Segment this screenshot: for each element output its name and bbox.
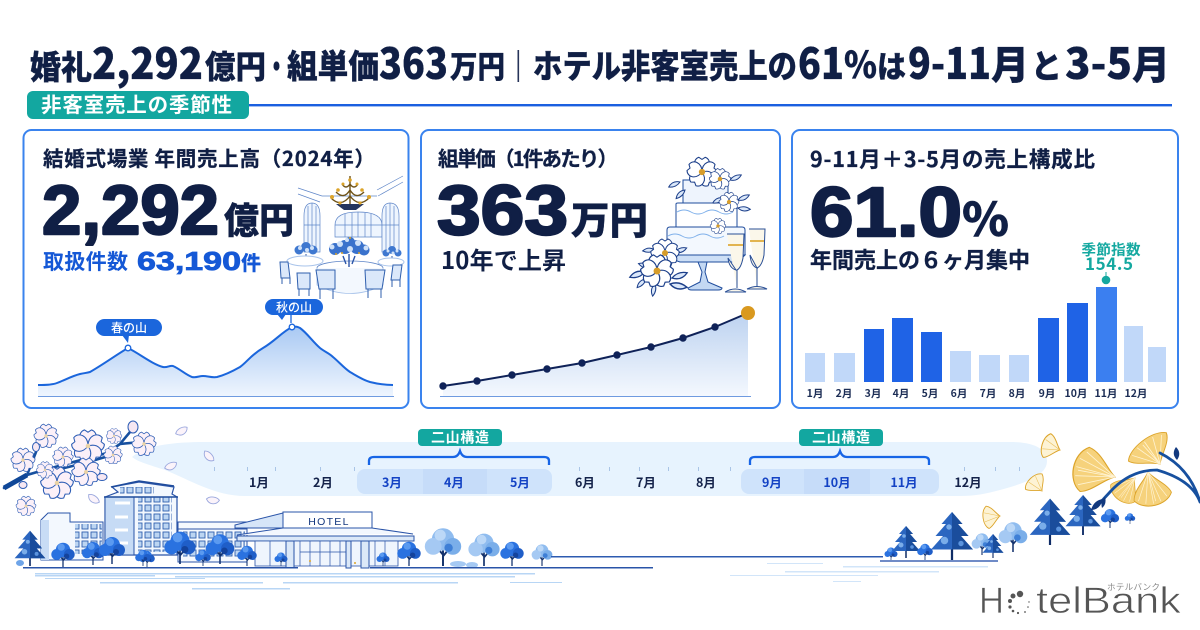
- month labels: 10月: [823, 472, 851, 491]
- bar chart: monthly index: 1月: [807, 386, 823, 401]
- bar chart: monthly index: 5月: [922, 386, 938, 401]
- bracket: spring: [369, 451, 549, 465]
- tower: [104, 481, 178, 555]
- illustration: ballroom: [280, 176, 404, 299]
- title: 61: [798, 30, 844, 92]
- bar chart: monthly index: 12月: [1125, 386, 1147, 401]
- title: 9-11: [908, 30, 991, 92]
- badge: two peaks, autumn: [799, 428, 883, 448]
- title: 月: [991, 35, 1029, 91]
- title: [30, 30, 1170, 92]
- callout: spring peak: 春の山: [111, 319, 147, 336]
- badge: two peaks, spring: 二山構造: [431, 428, 489, 448]
- panel: annual revenue: 件: [241, 247, 261, 276]
- unit: 万円: [571, 190, 648, 245]
- title: ・: [266, 42, 287, 88]
- icon: champagne glasses: [725, 229, 767, 292]
- badge: two peaks, autumn: 二山構造: [812, 428, 870, 448]
- trees: [15, 528, 552, 568]
- month labels: 1月: [249, 472, 269, 491]
- right wing: [178, 522, 247, 562]
- title: 3-5: [1065, 30, 1132, 92]
- illustration: autumn treeline: [730, 495, 1160, 600]
- month labels: 12月: [954, 472, 982, 491]
- callout: peak index: 季節指数: [1082, 239, 1141, 260]
- month labels: 4月: [444, 472, 464, 491]
- title: 月: [1132, 35, 1170, 91]
- logo: HotelBank: telBank: [1036, 580, 1182, 621]
- month labels: 5月: [510, 472, 530, 491]
- tables and chairs: [280, 237, 404, 299]
- left wing: [41, 513, 103, 560]
- month labels: 9月: [762, 472, 782, 491]
- icon: chandelier: [330, 176, 371, 210]
- month labels: 7月: [636, 472, 656, 491]
- bar chart: monthly index: 7月: [980, 386, 996, 401]
- section header: 非客室売上の季節性: [41, 88, 232, 118]
- ticks: [214, 467, 1020, 471]
- highlight: March to May: [357, 469, 552, 494]
- title: ホテル非客室売上の: [533, 40, 797, 88]
- line chart: price rise: [439, 306, 755, 397]
- month labels: 11月: [890, 472, 918, 491]
- unit: 億円: [224, 192, 294, 244]
- bar chart: monthly index: 4月: [893, 386, 909, 401]
- illustration: hotel building: [15, 481, 883, 590]
- value: 2,292: [42, 171, 219, 249]
- month labels: 8月: [696, 472, 716, 491]
- title: と: [1031, 40, 1062, 88]
- value: 61.0: [810, 173, 962, 251]
- subtext: 年間売上の６ヶ月集中: [810, 243, 1030, 275]
- bar chart: monthly index: 6月: [951, 386, 967, 401]
- title: 2,292: [92, 30, 203, 92]
- logo: HotelBank: H: [979, 580, 1004, 621]
- callout: autumn peak: [265, 298, 323, 323]
- heading: 結婚式場業 年間売上高（2024年）: [43, 142, 375, 172]
- title: 組単価: [287, 40, 379, 88]
- logo: HotelBank: ホテルバンク: [1107, 581, 1160, 593]
- bar chart: monthly index: 11月: [1095, 386, 1117, 401]
- callout: peak index: [1082, 239, 1141, 284]
- title: 万円: [450, 42, 505, 87]
- panel: annual revenue: [24, 130, 408, 408]
- logo: HotelBank: [979, 580, 1182, 621]
- title: %: [844, 35, 877, 89]
- heading: 組単価（1件あたり）: [438, 142, 618, 172]
- illustration: ginkgo: [982, 427, 1200, 529]
- bar chart: monthly index: 10月: [1065, 386, 1087, 401]
- callout: autumn peak: 秋の山: [276, 298, 312, 316]
- month labels: 2月: [313, 472, 333, 491]
- subtext: 10年で上昇: [441, 241, 566, 276]
- case count label: 取扱件数: [43, 246, 128, 276]
- title: 億円: [205, 42, 266, 88]
- bar chart: monthly index: [805, 239, 1166, 401]
- illustration: cherry blossoms: [4, 421, 220, 517]
- heading: 9-11月＋3-5月の売上構成比: [810, 143, 1095, 174]
- unit: %: [962, 184, 1009, 250]
- illustration: wedding cake: [629, 157, 767, 296]
- icon: logo dots: [1008, 591, 1030, 614]
- callout: peak index: 154.5: [1085, 250, 1133, 275]
- panel: seasonal share: [792, 130, 1178, 408]
- case count value: 63,190: [137, 246, 241, 276]
- title: 363: [379, 30, 448, 92]
- ground lines: [23, 556, 883, 590]
- section header: [27, 88, 1172, 119]
- month labels: 3月: [382, 472, 402, 491]
- bar chart: monthly index: 2月: [836, 386, 852, 401]
- area chart: seasonal mountains: [38, 298, 394, 397]
- highlight: September to November: [741, 469, 939, 494]
- value: 363: [437, 171, 568, 249]
- badge: two peaks, spring: [418, 428, 502, 448]
- month labels: 6月: [575, 472, 595, 491]
- callout: spring peak: [96, 319, 162, 343]
- title: 婚礼: [30, 41, 92, 89]
- lobby: HOTEL: [308, 516, 350, 528]
- panel: unit price: [421, 130, 780, 408]
- title: は: [877, 42, 906, 87]
- timeline band: [132, 428, 1047, 496]
- lobby: [235, 512, 414, 568]
- bar chart: monthly index: 9月: [1039, 386, 1055, 401]
- month labels: [249, 472, 982, 491]
- bar chart: monthly index: 8月: [1009, 386, 1025, 401]
- bracket: autumn: [750, 451, 929, 465]
- bar chart: monthly index: 3月: [865, 386, 881, 401]
